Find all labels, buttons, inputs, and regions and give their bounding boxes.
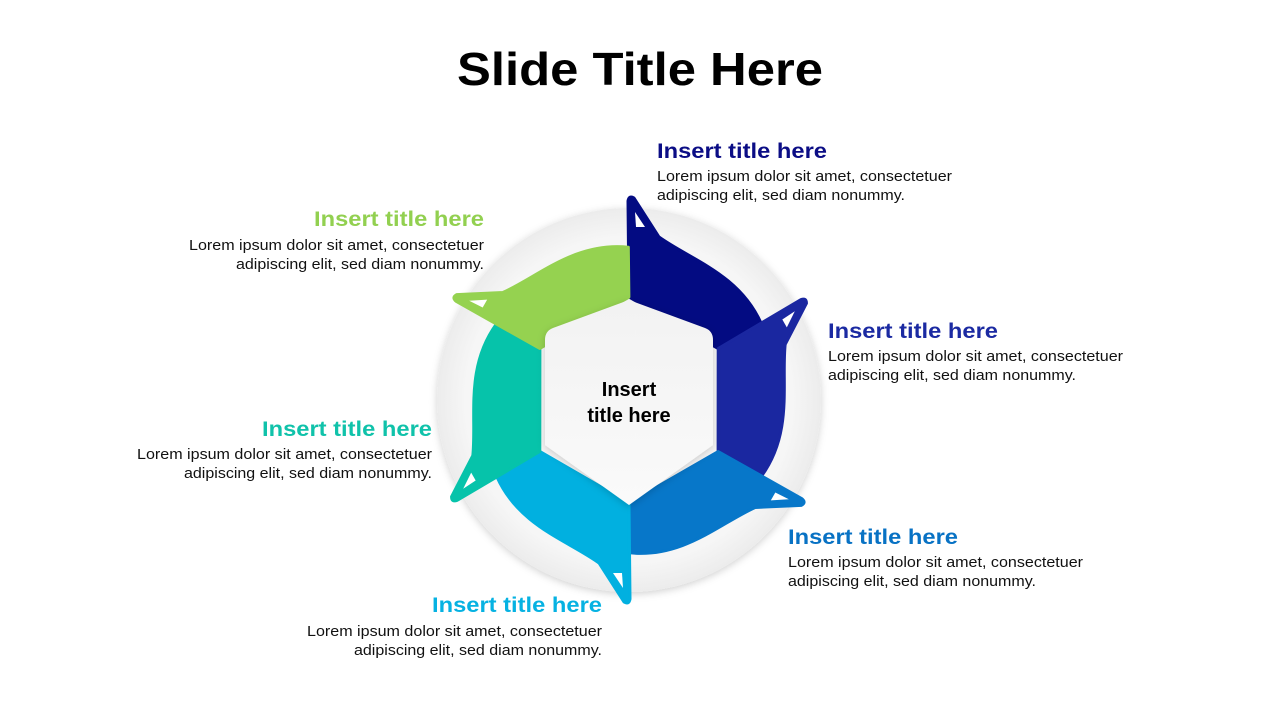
- text block: mid blue: [788, 526, 1083, 590]
- text block: blue: adipiscing elit, sed diam nonummy.: [828, 367, 1076, 384]
- text block: navy: Insert title here: [657, 140, 827, 163]
- segment: cyan: [497, 452, 630, 603]
- text block: teal: Insert title here: [262, 418, 432, 441]
- segment: mid blue: [608, 425, 805, 616]
- text block: navy: adipiscing elit, sed diam nonummy.: [657, 187, 905, 204]
- segment: navy: [628, 197, 761, 348]
- text block: blue: Insert title here: [828, 320, 998, 343]
- text block: teal: adipiscing elit, sed diam nonummy.: [184, 465, 432, 482]
- text block: mid blue: Lorem ipsum dolor sit amet, consectetuer: [788, 554, 1083, 571]
- text block: cyan: [307, 594, 602, 659]
- text block: green: [189, 208, 484, 273]
- title: Slide Title Here: [457, 43, 823, 95]
- text block: green: Lorem ipsum dolor sit amet, consectetuer: [189, 237, 484, 254]
- text block: teal: Lorem ipsum dolor sit amet, consectetuer: [137, 446, 432, 463]
- text block: teal: [137, 418, 432, 482]
- text block: cyan: Insert title here: [432, 594, 602, 617]
- diagram: cycle: [387, 184, 871, 616]
- text block: mid blue: Insert title here: [788, 526, 958, 549]
- text block: green: adipiscing elit, sed diam nonummy.: [236, 256, 484, 273]
- outer circle: [437, 208, 821, 592]
- text block: blue: [828, 320, 1123, 384]
- text block: navy: Lorem ipsum dolor sit amet, consectetuer: [657, 168, 952, 185]
- text block: cyan: Lorem ipsum dolor sit amet, consectetuer: [307, 623, 602, 640]
- text block: mid blue: adipiscing elit, sed diam nonummy.: [788, 573, 1036, 590]
- text block: navy: [657, 140, 952, 204]
- text block: green: Insert title here: [314, 208, 484, 231]
- text block: cyan: adipiscing elit, sed diam nonummy.: [354, 642, 602, 659]
- text block: blue: Lorem ipsum dolor sit amet, consectetuer: [828, 348, 1123, 365]
- segment: teal: [387, 311, 585, 502]
- center text line 2: title here: [587, 405, 671, 427]
- segment: blue: [673, 298, 871, 489]
- segment: green: [453, 184, 650, 375]
- center text: Insert: [602, 379, 657, 401]
- center shield: [545, 300, 713, 505]
